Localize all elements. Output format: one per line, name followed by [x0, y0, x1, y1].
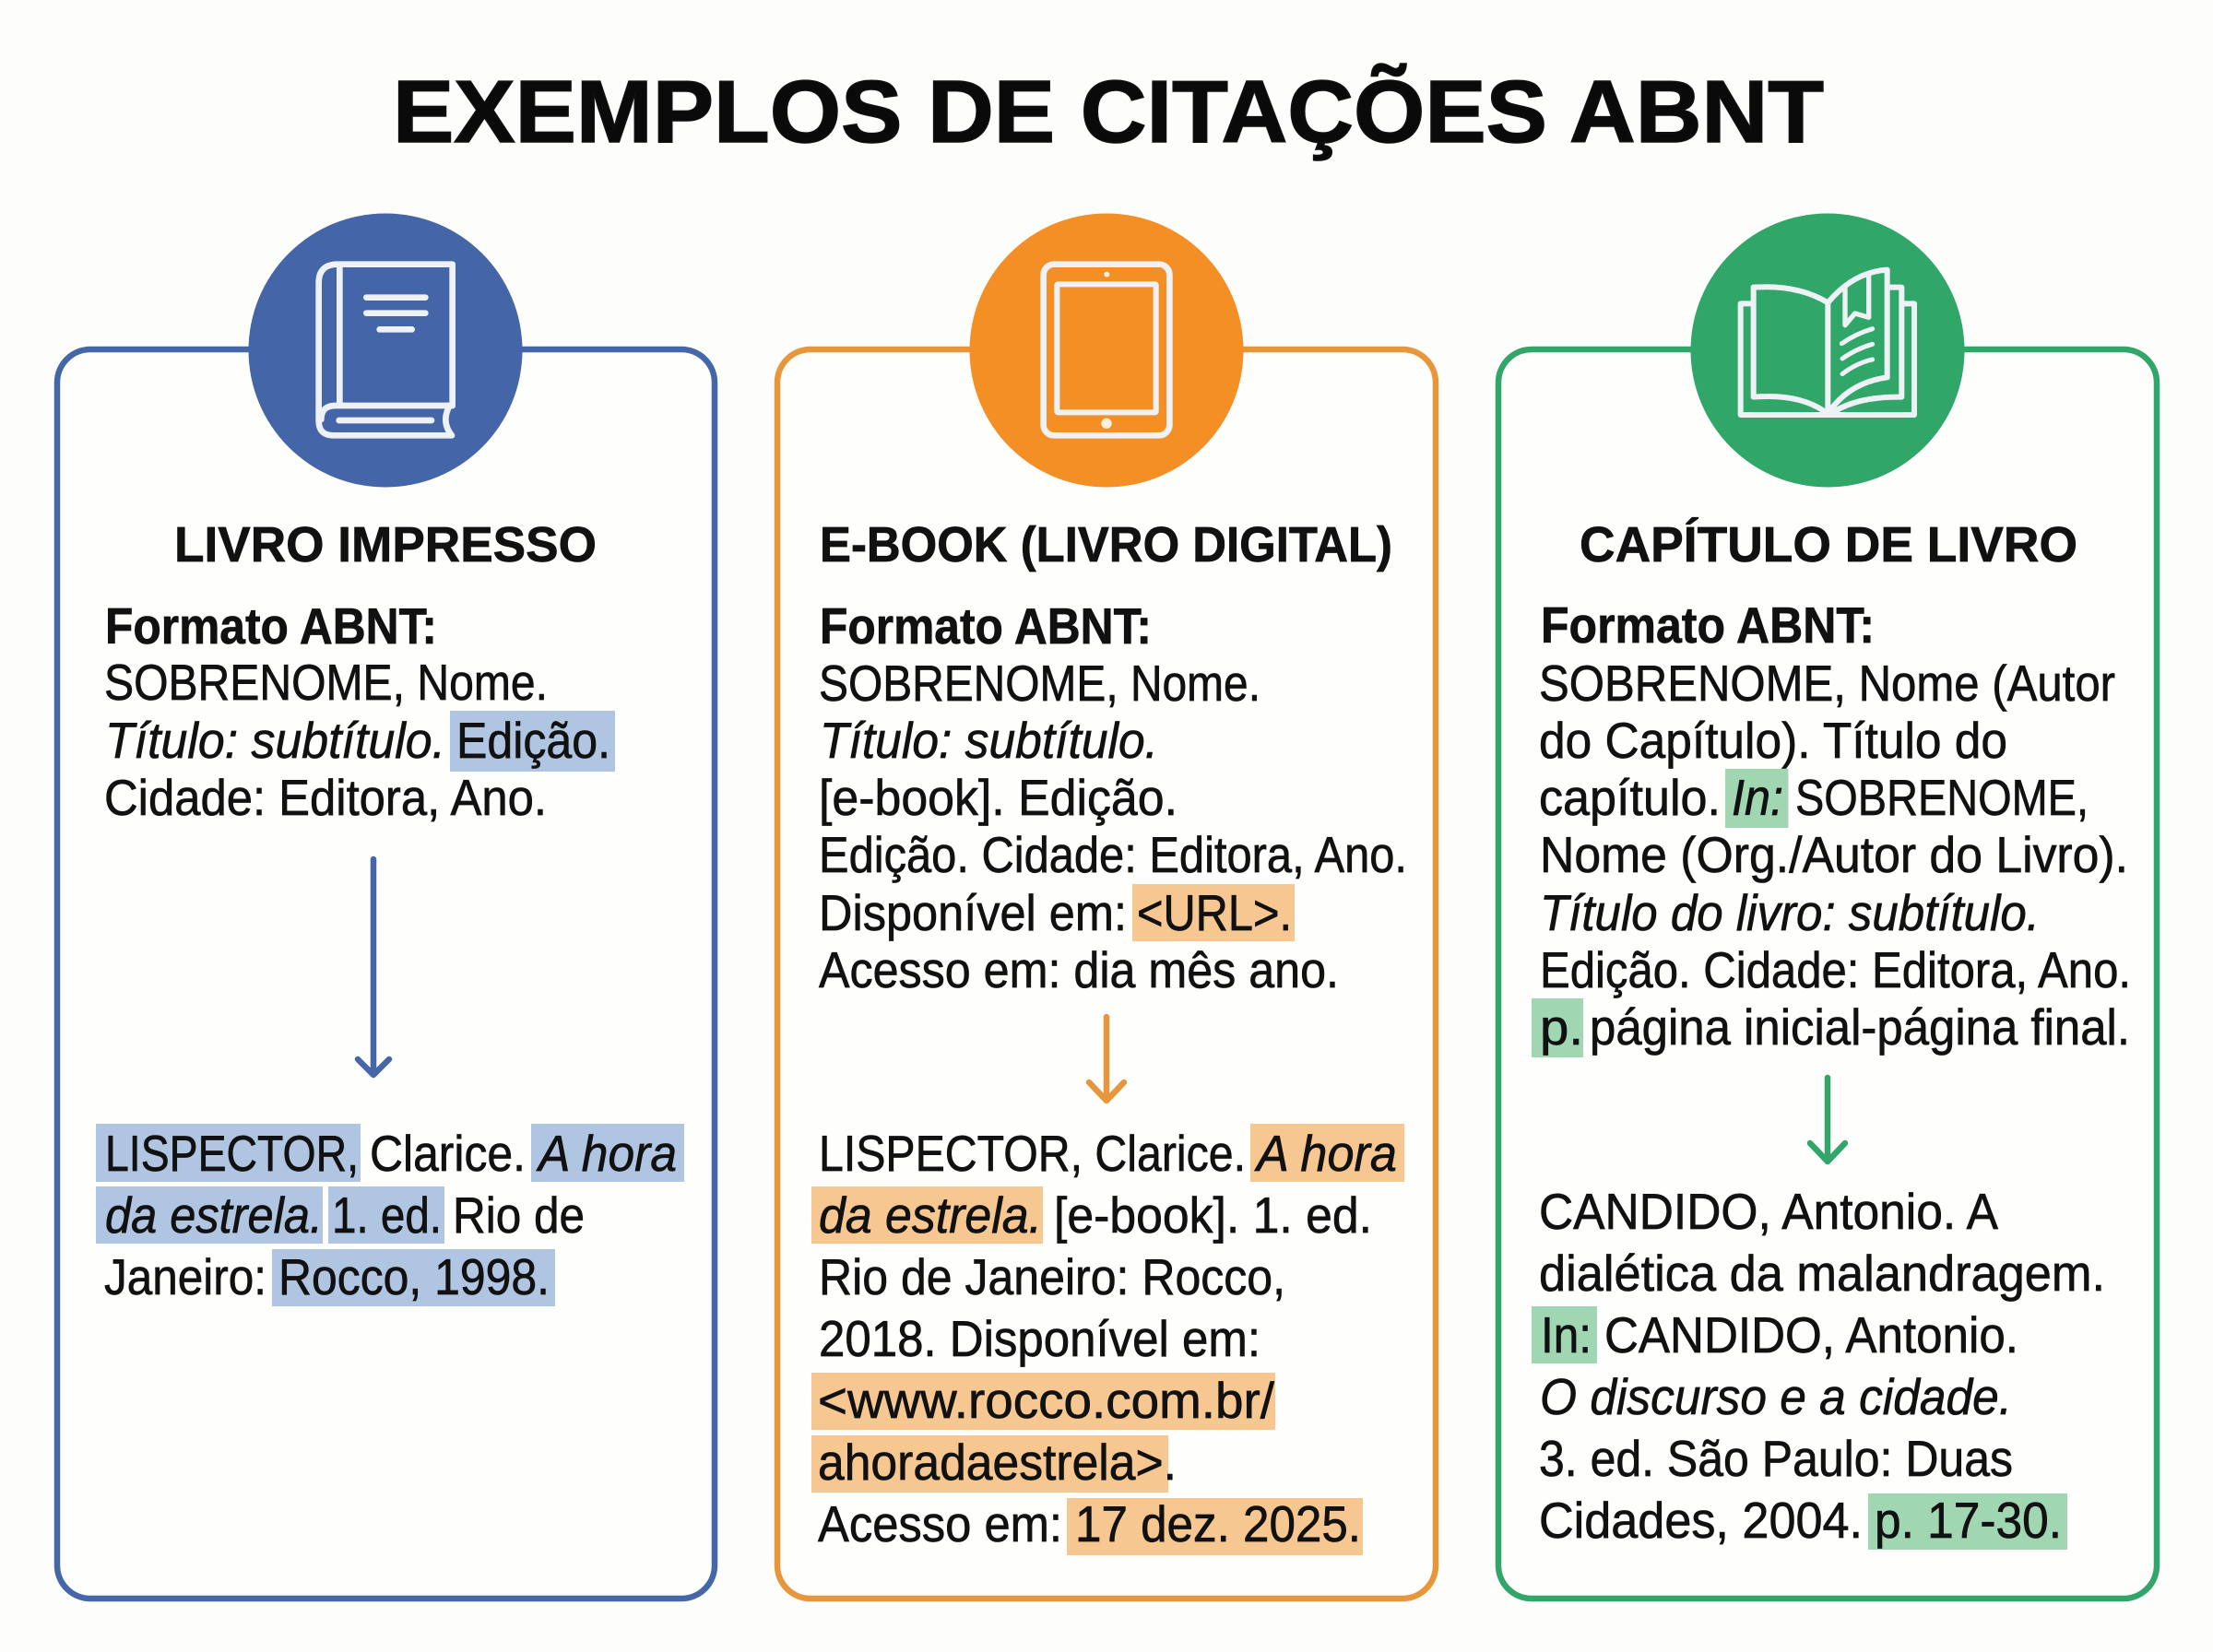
format block: capítulo: SOBRENOME, Nome (Autor [1539, 655, 2115, 712]
example citation: Lispector e-book: ahoradaestrela>. [818, 1434, 1177, 1491]
arrow: green [1810, 1078, 1845, 1162]
panel: e-book [777, 214, 1436, 1599]
example citation: Candido chapter: O discurso e a cidade. [1540, 1368, 2012, 1425]
example citation: Lispector e-book: Acesso em: [818, 1495, 1062, 1552]
format block: capítulo [1532, 596, 2131, 1057]
format block: capítulo: SOBRENOME, [1795, 769, 2089, 826]
example citation: Candido chapter: 3. ed. São Paulo: Duas [1539, 1430, 2013, 1487]
icon: tablet [970, 214, 1243, 487]
format block: capítulo: Edição. Cidade: Editora, Ano. [1540, 941, 2131, 998]
example citation: Lispector e-book: <www.rocco.com.br/ [818, 1372, 1275, 1429]
format block: livro impresso: SOBRENOME, Nome. [104, 654, 548, 711]
example citation: Lispector print: Clarice. [370, 1125, 526, 1182]
example citation: Candido chapter: p. 17-30. [1875, 1492, 2062, 1549]
format block: capítulo: página inicial-página final. [1590, 998, 2130, 1056]
example citation: Candido chapter: CANDIDO, Antonio. [1604, 1306, 2018, 1363]
example citation: Lispector e-book: Rio de Janeiro: Rocco, [819, 1248, 1285, 1305]
arrow: blue [358, 859, 389, 1075]
format block: e-book: Edição. Cidade: Editora, Ano. [819, 826, 1407, 883]
example citation: Candido chapter: Cidades, 2004. [1539, 1492, 1863, 1549]
example citation: Lispector print: LISPECTOR, [105, 1125, 359, 1182]
panel: livro impresso [57, 214, 715, 1599]
example citation: Lispector print [96, 1124, 684, 1306]
format block: capítulo: Formato ABNT: [1541, 596, 1875, 654]
format block: e-book: SOBRENOME, Nome. [819, 655, 1260, 712]
format block: e-book: [e-book]. Edição. [819, 769, 1178, 826]
format block: capítulo: capítulo. [1539, 769, 1721, 826]
format block: e-book: Acesso em: dia mês ano. [819, 941, 1339, 998]
panel: capítulo de livro [1498, 214, 2157, 1599]
example citation: Lispector e-book: da estrela. [819, 1186, 1042, 1244]
heading: livro impresso: LIVRO IMPRESSO [174, 517, 597, 572]
format block: capítulo: Nome (Org./Autor do Livro). [1540, 826, 2128, 883]
format block: livro impresso [104, 597, 615, 826]
example citation: Lispector print: da estrela. [105, 1186, 323, 1244]
example citation: Candido chapter [1532, 1183, 2105, 1550]
example citation: Lispector print: Rocco, 1998. [278, 1248, 550, 1305]
format block: livro impresso: Formato ABNT: [105, 597, 437, 655]
example citation: Lispector print: Rio de [453, 1186, 585, 1244]
example citation: Lispector e-book [811, 1124, 1404, 1555]
format block: e-book: <URL>. [1137, 884, 1292, 941]
format block: capítulo: do Capítulo). Título do [1539, 712, 2007, 769]
arrow: orange [1089, 1017, 1124, 1101]
example citation: Candido chapter: dialética da malandragem. [1539, 1245, 2105, 1302]
format block: livro impresso: Edição. [456, 712, 610, 769]
heading: capítulo de livro: CAPÍTULO DE LIVRO [1580, 517, 2077, 572]
icon: printed book [249, 214, 522, 487]
example citation: Lispector e-book: 2018. Disponível em: [819, 1310, 1260, 1367]
format block: e-book: Título: subtítulo. [820, 712, 1158, 769]
example citation: Lispector e-book: [e-book]. 1. ed. [1054, 1186, 1372, 1244]
example citation: Lispector print: Janeiro: [104, 1248, 266, 1305]
heading: e-book: E-BOOK (LIVRO DIGITAL) [820, 517, 1392, 572]
example citation: Lispector e-book: A hora [1254, 1125, 1397, 1182]
format block: capítulo: In: [1732, 769, 1783, 826]
example citation: Candido chapter: In: [1541, 1306, 1592, 1363]
format block: e-book: Disponível em: [819, 884, 1127, 941]
format block: livro impresso: Cidade: Editora, Ano. [104, 769, 547, 826]
format block: e-book [819, 597, 1407, 998]
example citation: Lispector print: A hora [536, 1125, 677, 1182]
example citation: Lispector e-book: 17 dez. 2025. [1075, 1495, 1361, 1552]
example citation: Lispector e-book: LISPECTOR, Clarice. [819, 1125, 1246, 1182]
title: EXEMPLOS DE CITAÇÕES ABNT [393, 63, 1824, 161]
format block: capítulo: p. [1540, 998, 1583, 1056]
icon: open book [1691, 214, 1964, 487]
format block: e-book: Formato ABNT: [820, 597, 1152, 655]
example citation: Lispector print: 1. ed. [332, 1186, 442, 1244]
format block: capítulo: Título do livro: subtítulo. [1540, 884, 2040, 941]
example citation: Candido chapter: CANDIDO, Antonio. A [1539, 1183, 1998, 1240]
format block: livro impresso: Título: subtítulo. [105, 712, 445, 769]
